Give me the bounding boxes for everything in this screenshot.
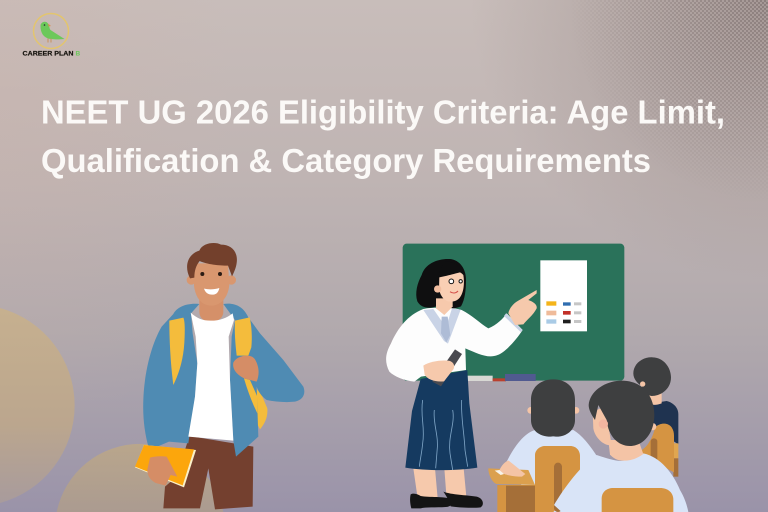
front student xyxy=(554,381,688,512)
hair back xyxy=(416,259,466,309)
microphone and hand xyxy=(423,349,462,386)
backpack pouch xyxy=(253,385,267,429)
legs xyxy=(413,468,466,498)
decorative circle bottom xyxy=(57,444,223,512)
paper on desk xyxy=(495,470,504,475)
collar xyxy=(423,308,461,344)
neck xyxy=(199,293,223,322)
back student xyxy=(633,357,678,444)
face xyxy=(593,407,612,445)
icon: green bird xyxy=(40,22,64,42)
hair xyxy=(187,243,237,278)
shirt and arms xyxy=(386,308,523,382)
paper chart xyxy=(540,260,587,331)
teacher xyxy=(386,259,537,508)
middle chair xyxy=(535,446,580,512)
backpack straps xyxy=(169,317,257,413)
t-shirt xyxy=(188,313,234,441)
logo xyxy=(22,14,80,58)
illustration: seated students xyxy=(488,357,688,512)
right side xyxy=(223,304,304,457)
illustration: teacher and chalkboard xyxy=(386,244,624,508)
left cuff xyxy=(149,448,169,458)
title line 2: Qualification & Category Requirements xyxy=(41,142,651,179)
left side xyxy=(143,304,199,450)
front chair xyxy=(602,488,673,512)
shoes xyxy=(410,494,453,508)
logo ring xyxy=(34,14,68,48)
logo letter B: B xyxy=(76,50,80,58)
head xyxy=(187,243,237,306)
skirt xyxy=(405,370,477,470)
middle student xyxy=(507,379,598,512)
halftone dot texture xyxy=(598,0,768,170)
hand on strap xyxy=(233,356,259,382)
hair xyxy=(589,381,654,446)
hair xyxy=(531,379,575,437)
title xyxy=(41,94,725,179)
title line 1: NEET UG 2026 Eligibility Criteria: Age Limit, xyxy=(41,94,725,130)
sleeve cuff xyxy=(504,313,523,332)
jacket xyxy=(143,304,304,458)
pants xyxy=(163,436,253,509)
illustration: male student xyxy=(135,243,304,509)
shirt xyxy=(554,453,688,512)
desk xyxy=(488,468,535,512)
student arm on desk xyxy=(499,461,525,477)
ear xyxy=(599,419,608,429)
decorative circle left xyxy=(0,308,75,503)
neck xyxy=(608,440,643,461)
back chair xyxy=(637,424,678,477)
shirt xyxy=(507,430,598,512)
book xyxy=(135,445,196,487)
neck xyxy=(436,298,453,315)
logo text: CAREER PLAN xyxy=(22,50,74,58)
chalkboard xyxy=(403,244,624,381)
face xyxy=(439,271,464,302)
pointing hand xyxy=(508,290,537,325)
hand holding book xyxy=(147,456,177,486)
chalk tray items xyxy=(467,374,536,381)
